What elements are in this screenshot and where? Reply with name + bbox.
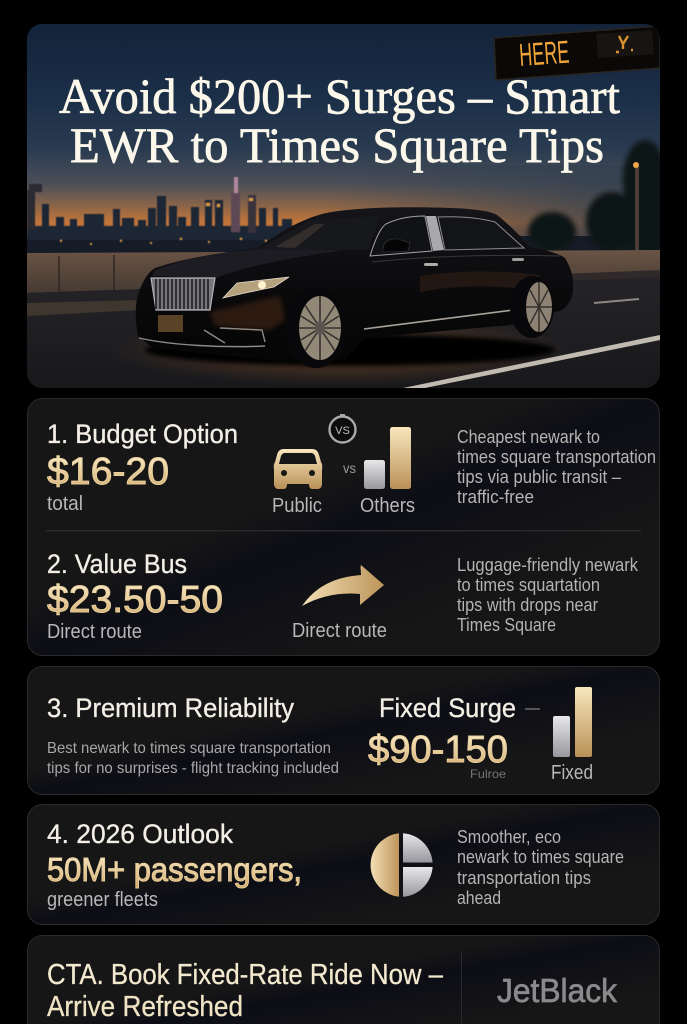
front wheel [299, 296, 341, 368]
panel: 2026 outlook [28, 804, 660, 924]
hood highlight [152, 249, 345, 278]
heading and stat: greener fleets [47, 889, 158, 911]
description: tips for no surprises - flight tracking included [47, 760, 339, 777]
bar chart: fixed: Fixed [551, 762, 593, 784]
panel: hero photo [27, 24, 676, 388]
heading: 3. Premium Reliability [47, 693, 294, 723]
bumper trim [139, 328, 265, 347]
option 2 description: to times squartation [457, 575, 600, 595]
fixed surge price: $90-150 [368, 729, 508, 771]
description: newark to times square [457, 847, 624, 867]
cta text: Arrive Refreshed [47, 991, 243, 1023]
pie chart [371, 833, 433, 897]
option 2 description: tips with drops near [457, 595, 598, 615]
option 2 description [457, 555, 639, 635]
description [457, 827, 624, 908]
license plate [158, 315, 183, 332]
sign: HERE: HERE [518, 34, 570, 73]
logo: JetBlack: JetBlack [497, 972, 617, 1009]
icon: vs stopwatch [330, 414, 356, 442]
mirror [383, 239, 410, 252]
description [47, 740, 339, 777]
option 2 heading and price: 2. Value Bus [47, 549, 187, 579]
road [27, 270, 660, 388]
description: Smoother, eco [457, 827, 561, 847]
car [136, 207, 573, 368]
option 2 heading and price: Direct route [47, 621, 142, 643]
description: Best newark to times square transportation [47, 740, 331, 757]
bar chart: fixed [551, 687, 593, 784]
heading and stat: 50M+ passengers, [47, 851, 302, 888]
panel: call to action [28, 936, 660, 1024]
option 1 heading and price [47, 419, 238, 515]
cta text: CTA. Book Fixed-Rate Ride Now – [47, 959, 444, 991]
side windows [370, 216, 432, 256]
grille [151, 278, 215, 310]
vs label: vs [343, 460, 356, 476]
cta text [47, 959, 444, 1023]
horizon band [27, 236, 660, 254]
panel: premium reliability [28, 666, 660, 794]
heading and stat: 4. 2026 Outlook [47, 819, 233, 849]
arrow: direct route: Direct route [292, 620, 387, 642]
option 1 description: times square transportation [457, 447, 656, 467]
description: ahead [457, 888, 501, 908]
title: Avoid $200+ Surges – Smart [59, 68, 620, 124]
option 1 description: Cheapest newark to [457, 427, 600, 447]
description: transportation tips [457, 868, 591, 888]
rear wheel [510, 276, 554, 338]
icon: vs stopwatch: VS [335, 425, 350, 437]
title [59, 68, 620, 173]
door details [424, 263, 438, 266]
icon: car [274, 449, 322, 489]
arrow: direct route [292, 565, 387, 642]
option 2 heading and price: $23.50-50 [47, 579, 223, 621]
option 1 heading and price: $16-20 [47, 451, 169, 493]
fixed surge price: Fulroe [470, 767, 506, 781]
bar chart: public vs others: Public [272, 495, 322, 517]
option 1 heading and price: 1. Budget Option [47, 419, 238, 449]
option 2 description: Times Square [457, 615, 556, 635]
fixed surge price [368, 693, 540, 781]
option 1 description [457, 427, 656, 507]
highway barrier [27, 250, 660, 293]
windshield [259, 241, 370, 250]
panel: options 1 and 2 [28, 398, 660, 656]
bar chart: public vs others [272, 427, 415, 517]
option 1 description: tips via public transit – [457, 467, 621, 487]
trees and street lamp [525, 138, 660, 250]
headlight [223, 277, 289, 298]
bumper glow [210, 296, 285, 330]
dusk sky [27, 24, 660, 245]
sign: HERE [494, 26, 660, 80]
option 2 heading and price [47, 549, 223, 643]
bar chart: public vs others: Others [360, 495, 415, 517]
title: EWR to Times Square Tips [70, 117, 604, 173]
option 2 description: Luggage-friendly newark [457, 555, 639, 575]
option 1 heading and price: total [47, 493, 83, 515]
fixed surge price: Fixed Surge [379, 693, 516, 723]
option 1 description: traffic-free [457, 487, 534, 507]
city skyline [27, 177, 300, 245]
heading and stat [47, 819, 302, 911]
